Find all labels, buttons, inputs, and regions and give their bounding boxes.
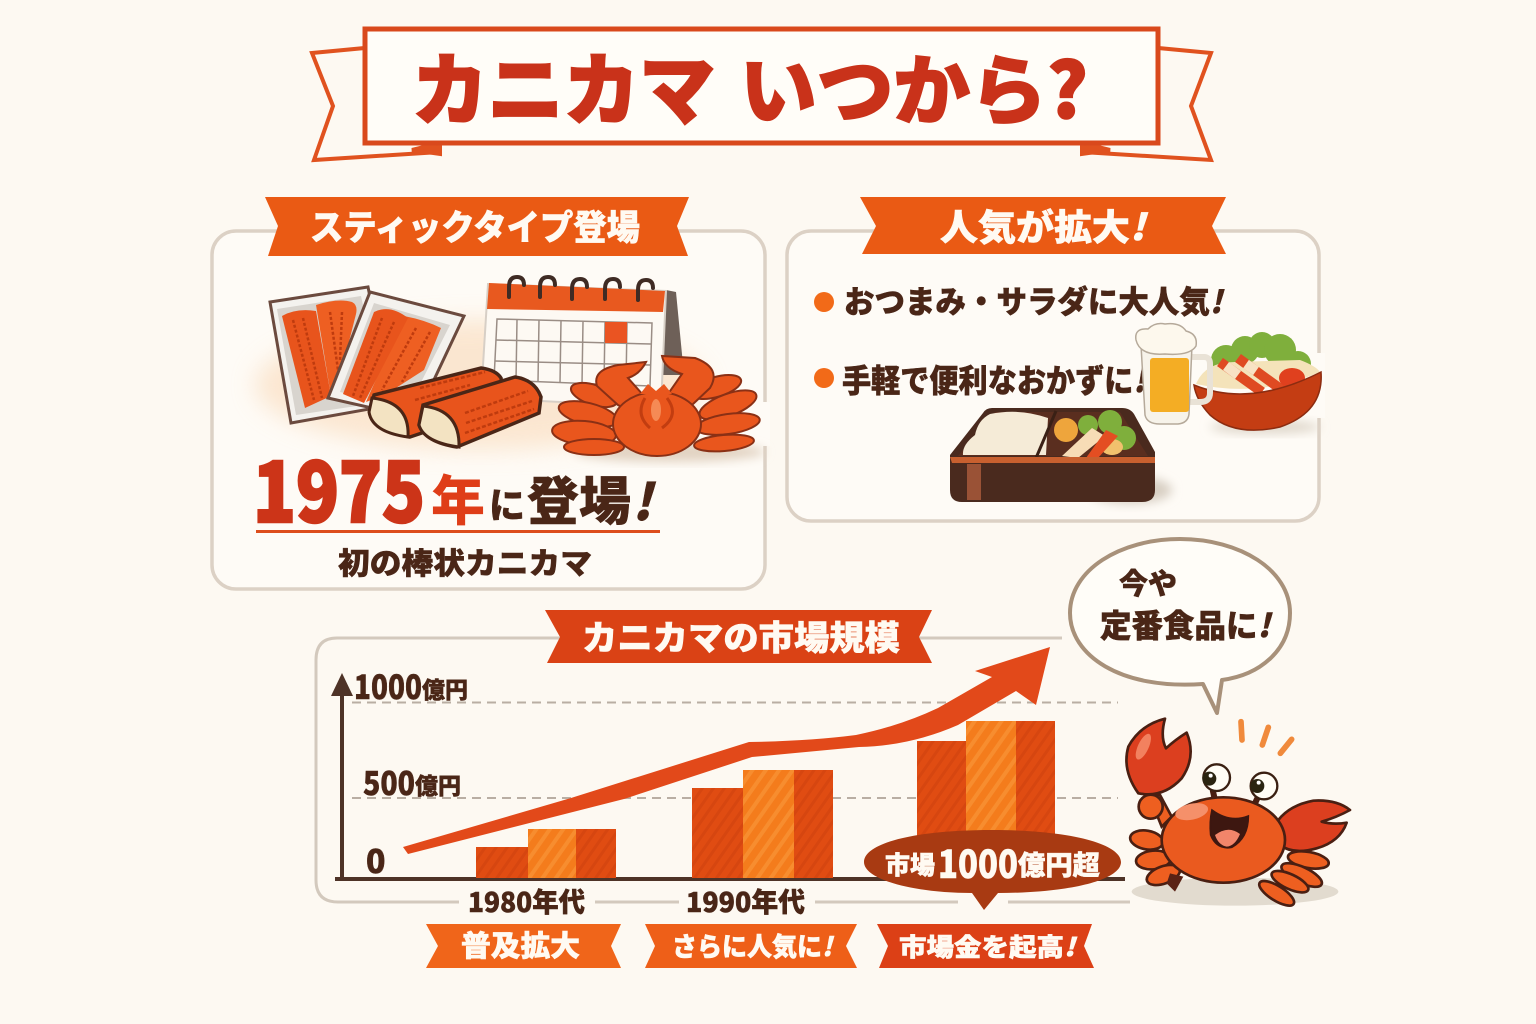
bars 1990s [692, 770, 833, 878]
bars 1980s [476, 829, 616, 878]
right claw [1276, 801, 1350, 851]
shadow [1132, 878, 1338, 906]
banner heading [860, 197, 1226, 254]
callout: market over 100 billion yen: 1000 [938, 834, 1018, 889]
body [1162, 797, 1285, 883]
title plate [365, 29, 1158, 143]
y axis [331, 673, 353, 880]
banner heading: スティックタイプ登場 [310, 200, 640, 251]
y label 1000: 億円 [422, 671, 468, 705]
ribbon: market boom: 市場金を起高 ! [899, 928, 1077, 964]
bullet: handy side dish: 手軽で便利なおかずに! [842, 356, 1148, 402]
year headline: に [489, 477, 525, 529]
y label 1000: 1000 [354, 661, 422, 709]
callout: market over 100 billion yen: 市場 [885, 846, 935, 882]
title text: カニカマ [412, 29, 715, 141]
underline [256, 530, 660, 533]
subheading: 初の棒状カニカマ [338, 539, 592, 583]
chart banner heading: カニカマの市場規模 [582, 611, 900, 660]
callout: market over 100 billion yen [864, 830, 1121, 910]
x axis [335, 877, 1125, 881]
speech bubble: 今や [1119, 561, 1177, 603]
legs [1129, 828, 1330, 910]
icon: packaged crab sticks [270, 287, 464, 423]
banner heading: 人気が拡大 ! [940, 199, 1149, 251]
eye stalks [1213, 790, 1257, 808]
year headline: 年 [431, 457, 485, 536]
panel frame [787, 231, 1319, 521]
icon: desk calendar [481, 277, 684, 407]
gridlines [352, 702, 1118, 798]
year headline: 登場 [527, 460, 631, 535]
eyes [1202, 764, 1277, 799]
panel: stick type debut [212, 197, 770, 589]
ribbon: more popular [645, 924, 857, 968]
bullet: snacks and salad: おつまみ・サラダに大人気! [844, 277, 1225, 322]
growth arrow [403, 647, 1050, 854]
icon: beer mug [1136, 324, 1210, 424]
panel frame [212, 231, 765, 589]
chart frame [316, 638, 1130, 902]
year headline [253, 427, 656, 546]
year headline: 1975 [253, 427, 425, 546]
ribbon: spread [426, 923, 621, 968]
soft peach glow [255, 320, 705, 450]
y label 500 [363, 759, 461, 805]
year headline: ! [632, 463, 656, 535]
panel: growing popularity [787, 197, 1325, 521]
icon: snow crab [551, 356, 765, 462]
y label 500: 500 [363, 759, 415, 805]
callout: market over 100 billion yen: 億円超 [1018, 844, 1100, 883]
mouth [1210, 810, 1248, 848]
panel: market size chart [316, 610, 1130, 968]
crab mascot [1126, 719, 1350, 910]
bars 2000s [917, 721, 1055, 878]
speech bubble [1070, 539, 1290, 713]
y label 500: 億円 [415, 767, 461, 801]
ribbon tails [312, 48, 1211, 160]
decade label 1980s: 1980年代 [468, 881, 585, 920]
ribbon: market boom [877, 924, 1094, 968]
icon: bento box [950, 408, 1172, 504]
y label 0: 0 [366, 837, 386, 883]
title banner: いつから? [740, 30, 1088, 140]
ribbon: spread: 普及拡大 [461, 923, 580, 965]
speech bubble: 定番食品に! [1100, 601, 1273, 647]
icon: cut crab sticks [369, 368, 541, 447]
raised claw [1126, 719, 1191, 827]
title banner [312, 29, 1211, 160]
excitement ticks [1241, 722, 1292, 753]
icon: salad bowl [1194, 332, 1321, 434]
ribbon: more popular: さらに人気に! [672, 927, 835, 964]
decade label 1990s: 1990年代 [686, 881, 805, 920]
